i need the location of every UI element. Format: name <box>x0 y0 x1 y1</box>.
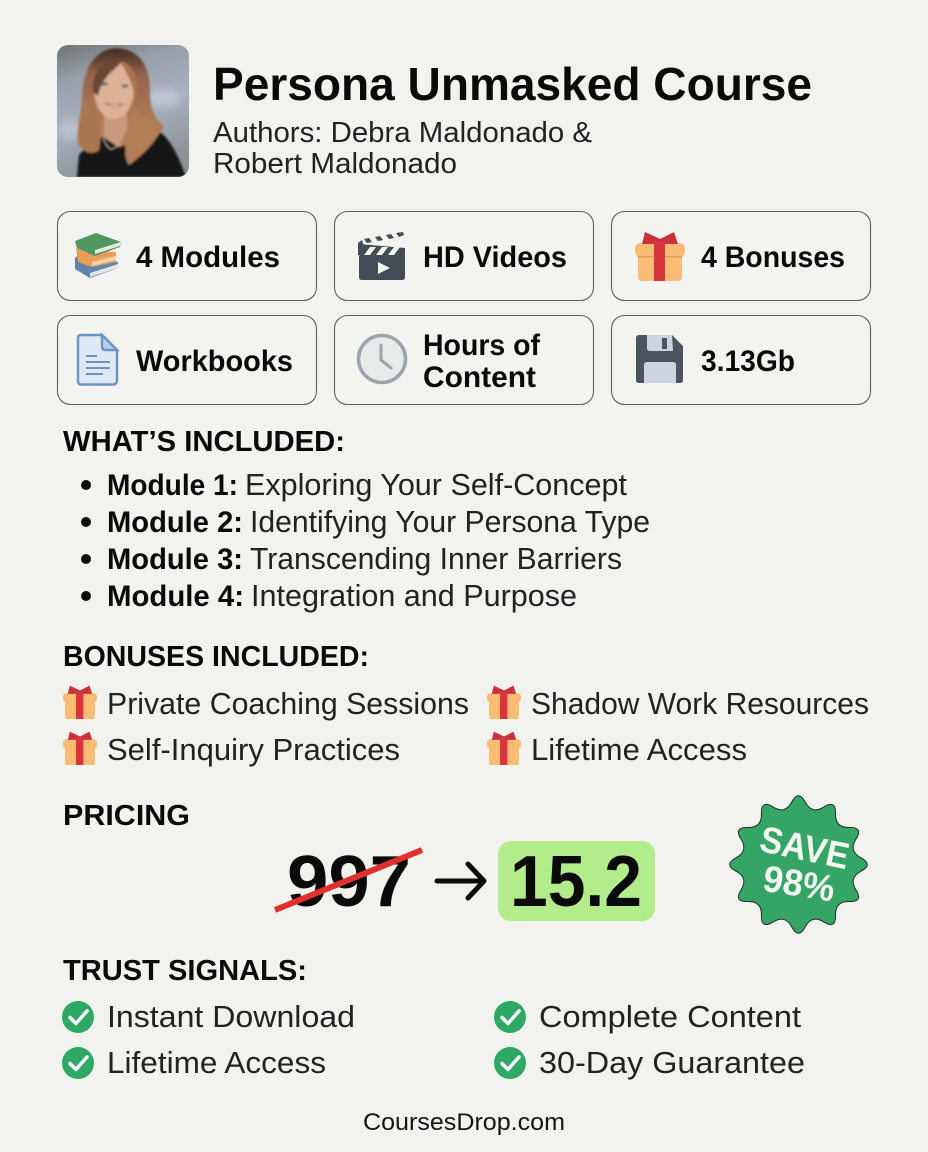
label: Workbooks <box>136 345 293 378</box>
icon: document <box>78 335 117 384</box>
trust: complete content: Complete Content <box>539 1000 802 1034</box>
arrow <box>437 864 484 898</box>
module list: Identifying Your Persona Type <box>250 505 650 539</box>
heading: BONUSES INCLUDED: <box>63 641 369 673</box>
section: trust signals <box>62 955 805 1080</box>
card: file size <box>612 316 870 404</box>
authors: Robert Maldonado <box>213 148 457 180</box>
section: what's included <box>63 426 650 613</box>
module list: Module 4: <box>107 580 244 613</box>
header <box>57 45 812 180</box>
module list: Module 1: <box>107 469 238 502</box>
title: Persona Unmasked Course <box>213 58 812 110</box>
label: 4 Modules <box>136 241 280 274</box>
card: workbooks <box>58 316 316 404</box>
icon: floppy disk <box>636 335 683 383</box>
icon: books <box>75 233 121 278</box>
trust: guarantee: 30-Day Guarantee <box>539 1046 805 1080</box>
module list: Module 3: <box>107 543 243 576</box>
module list: Exploring Your Self-Concept <box>245 468 628 502</box>
bonus: lifetime access: Lifetime Access <box>531 733 747 767</box>
label: Hours of <box>423 329 541 362</box>
icon: clock <box>358 336 406 382</box>
card: 4 modules <box>58 212 316 300</box>
new price: 15.2 <box>510 842 642 922</box>
icon: gift <box>635 232 685 281</box>
trust: lifetime access: Lifetime Access <box>107 1046 326 1080</box>
feature cards <box>58 212 870 404</box>
card: 4 bonuses <box>612 212 870 300</box>
save badge <box>730 796 867 933</box>
section: pricing <box>63 796 867 933</box>
module list: Module 2: <box>107 506 243 539</box>
heading: TRUST SIGNALS: <box>63 955 307 987</box>
authors <box>213 117 592 180</box>
heading: WHAT’S INCLUDED: <box>63 426 345 458</box>
author photo <box>57 45 189 177</box>
module list <box>81 468 650 613</box>
trust: instant download: Instant Download <box>107 1000 355 1034</box>
card: HD videos <box>334 212 594 300</box>
label: 3.13Gb <box>701 345 795 378</box>
save badge: 98% <box>760 858 838 910</box>
bonus: shadow work: Shadow Work Resources <box>531 687 869 721</box>
card: hours of content <box>334 316 594 404</box>
bonus: self-inquiry: Self-Inquiry Practices <box>107 733 400 767</box>
label: 4 Bonuses <box>701 241 845 274</box>
module list: Transcending Inner Barriers <box>250 542 622 576</box>
label <box>423 329 541 394</box>
save badge: SAVE <box>756 818 853 877</box>
section: bonuses <box>63 641 869 767</box>
label: HD Videos <box>423 241 567 274</box>
icon: clapperboard <box>358 232 405 280</box>
bonus: private coaching: Private Coaching Sessions <box>107 687 469 721</box>
footer: CoursesDrop.com <box>363 1109 565 1136</box>
module list: Integration and Purpose <box>251 579 577 613</box>
authors: Authors: Debra Maldonado & <box>213 117 592 149</box>
heading: PRICING <box>63 800 190 832</box>
old price struck through: 997 <box>287 842 411 922</box>
label: Content <box>423 361 536 394</box>
